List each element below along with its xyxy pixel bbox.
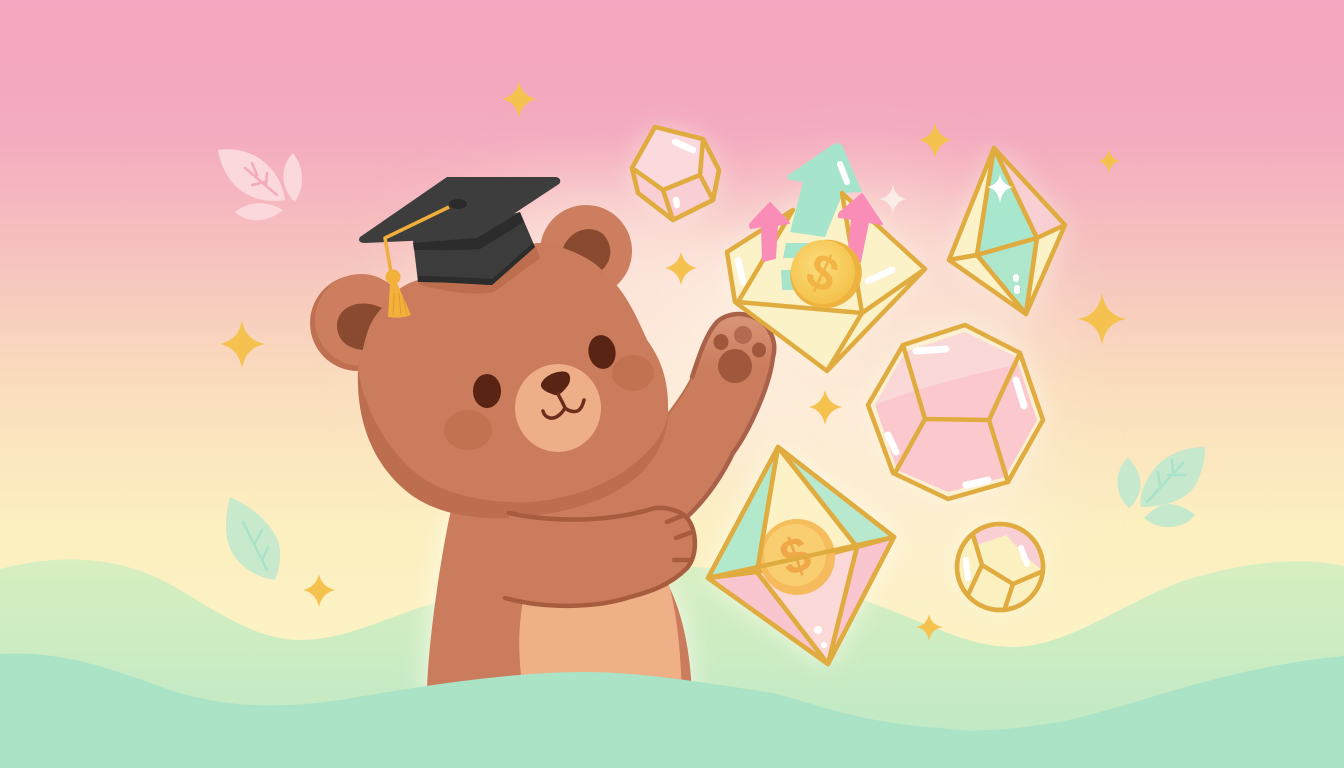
gem: envelope crystal with arrows and coin	[727, 143, 925, 371]
arrow: large green	[787, 143, 862, 237]
arrow: pink left	[750, 203, 789, 261]
halo behind bear and gems	[427, 127, 1065, 700]
bear eyes	[473, 374, 501, 408]
graduation cap	[359, 177, 560, 318]
hill: front	[0, 653, 1344, 768]
bear paw pads	[714, 326, 766, 383]
hill: back	[0, 559, 1344, 768]
bear hugging arm	[505, 508, 695, 606]
bear belly	[519, 585, 682, 692]
bear cheeks	[444, 410, 492, 450]
cap tassel	[385, 207, 449, 272]
gem: small round crystal	[957, 524, 1043, 610]
gem: large pink dodecahedron	[868, 325, 1043, 499]
faded coin: $	[773, 525, 818, 587]
gem: lower diamond crystal with coin	[708, 447, 894, 664]
bear right ear	[540, 205, 632, 297]
coin: $	[798, 242, 847, 304]
bear	[310, 177, 774, 692]
decoration: green leaf left	[226, 497, 280, 580]
coin	[781, 230, 871, 318]
bear raised arm	[540, 314, 774, 535]
decoration: green leaves right	[1117, 447, 1205, 527]
bear left ear	[310, 274, 407, 371]
gem: top-right crystal	[949, 148, 1065, 314]
soft central glow	[400, 180, 1050, 590]
green bars	[781, 243, 812, 290]
bear body	[427, 505, 692, 692]
decoration: pink leaves top left	[218, 149, 302, 220]
gem: top-left dodecahedron	[632, 127, 719, 220]
bear nose and mouth	[541, 372, 584, 418]
faded coin	[759, 519, 835, 595]
arrow: pink right	[839, 194, 882, 262]
sparkles	[220, 81, 1126, 641]
crystal edges	[727, 193, 925, 371]
bear head	[358, 243, 668, 518]
bear muzzle	[515, 364, 601, 452]
